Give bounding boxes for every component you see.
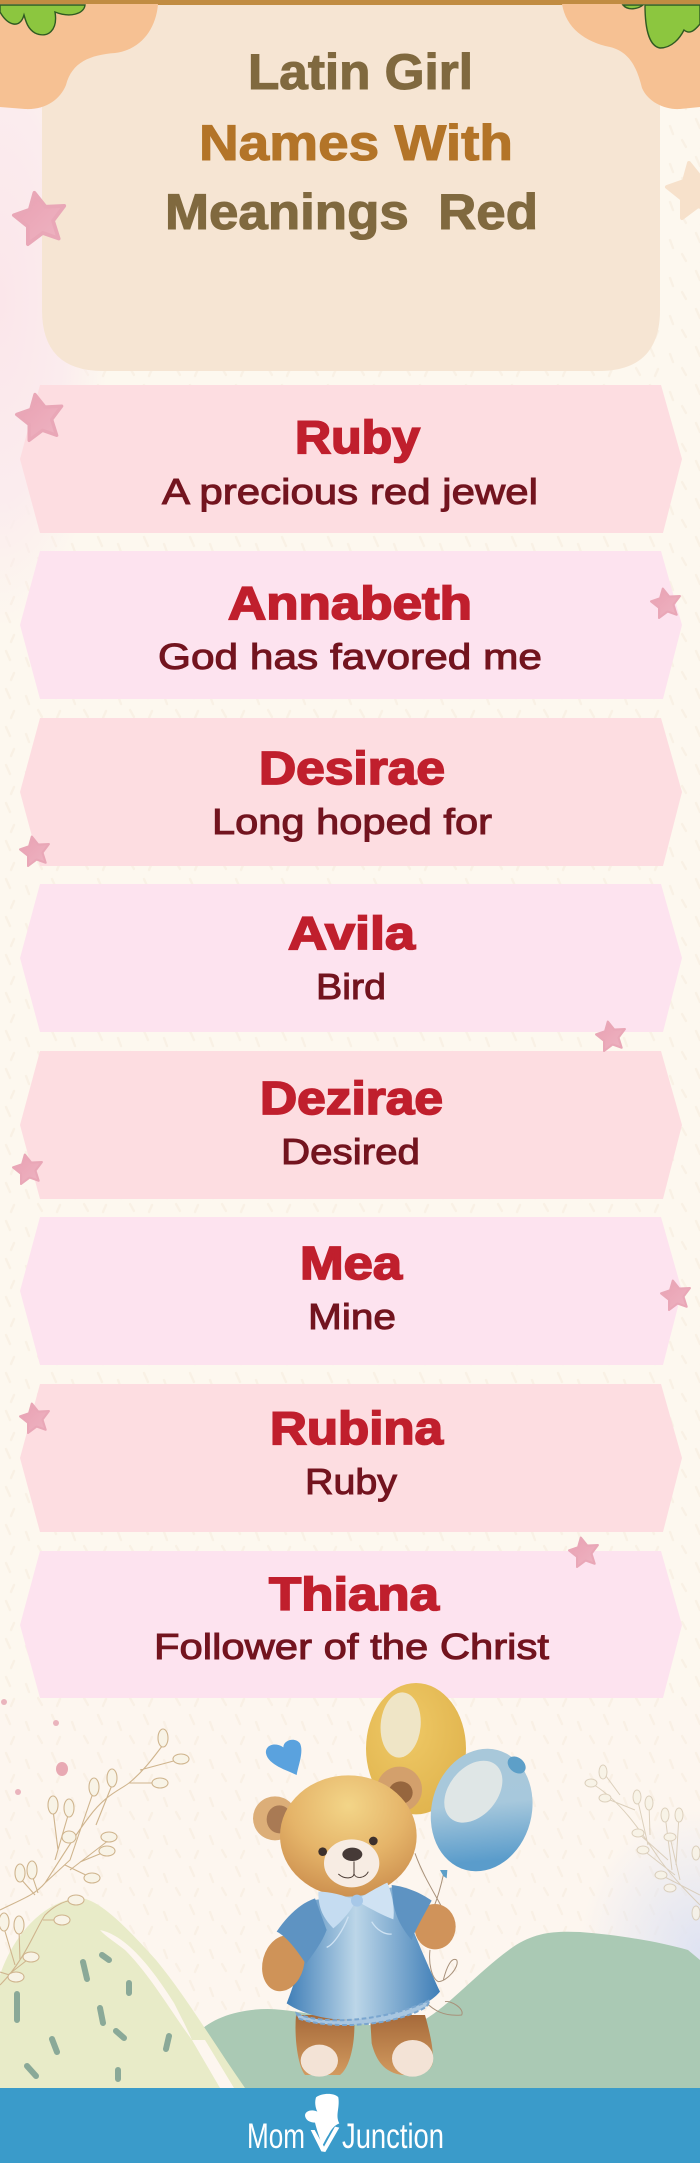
panel: Avila: Avila — [288, 907, 415, 959]
panel: Ruby: Ruby — [295, 411, 420, 463]
branch: right — [585, 1765, 700, 1920]
icon: mother and child silhouette — [305, 2094, 339, 2152]
panel: Dezirae — [20, 1051, 682, 1199]
dots — [1, 1699, 68, 1795]
panel: title background — [42, 0, 660, 371]
panel: Avila: Bird — [316, 966, 386, 1007]
hill: green — [192, 1932, 700, 2088]
panel: Avila — [20, 884, 682, 1032]
logo: MomJunction — [247, 2094, 444, 2156]
bear right hand — [414, 1904, 456, 1949]
panel: Thiana: Thiana — [269, 1568, 439, 1620]
panel: Mea — [20, 1217, 682, 1365]
illustration: teddy bear with balloons — [253, 1683, 546, 2077]
hill: light green with dashes — [0, 1898, 245, 2088]
panel: Rubina: Rubina — [270, 1402, 443, 1454]
blob: top right corner — [562, 4, 700, 109]
panel: Ruby — [20, 385, 682, 533]
panel: Mea: Mea — [300, 1237, 402, 1289]
panel: Annabeth — [20, 551, 682, 699]
top bar — [0, 0, 700, 5]
bear sleeves — [277, 1885, 432, 1964]
logo: MomJunction: Mom — [247, 2117, 305, 2156]
icon: leaf top left — [0, 5, 85, 35]
bear bow — [318, 1883, 394, 1947]
footer bar — [0, 2088, 700, 2163]
bear ears — [253, 1767, 422, 1840]
title: Names With — [199, 115, 513, 171]
stars — [13, 193, 690, 1567]
panel: Annabeth: Annabeth — [228, 577, 472, 629]
panel: Rubina — [20, 1384, 682, 1532]
panel: Mea: Mine — [308, 1296, 396, 1337]
blob: top left corner — [0, 4, 158, 109]
panel: Ruby: A precious red jewel — [162, 471, 538, 512]
icon: leaf top right — [623, 5, 700, 48]
balloon: yellow — [366, 1683, 466, 1814]
panel: Dezirae: Desired — [281, 1131, 420, 1172]
panel: Thiana — [20, 1551, 682, 1698]
bear left arm — [256, 1931, 311, 1996]
title: Meanings Red — [165, 184, 538, 240]
balloon strings — [415, 1853, 462, 2015]
panel: Desirae: Desirae — [259, 742, 445, 794]
star: peach right — [667, 163, 700, 218]
bear face — [318, 1837, 379, 1887]
panel: Annabeth: God has favored me — [158, 636, 542, 677]
bear head — [280, 1775, 417, 1897]
panel: Rubina: Ruby — [305, 1461, 397, 1502]
panel: Desirae: Long hoped for — [212, 801, 492, 842]
bear legs — [296, 2015, 433, 2077]
title — [165, 44, 538, 240]
panel: Thiana: Follower of the Christ — [154, 1626, 549, 1667]
logo: MomJunction: Junction — [342, 2117, 444, 2156]
title: Latin Girl — [248, 44, 473, 100]
icon: blue heart — [266, 1740, 301, 1775]
panel: Dezirae: Dezirae — [260, 1072, 443, 1124]
branch: left — [0, 1729, 189, 1985]
balloon: blue — [417, 1737, 546, 1883]
panel: Desirae — [20, 718, 682, 866]
bear dress — [287, 1887, 440, 2025]
